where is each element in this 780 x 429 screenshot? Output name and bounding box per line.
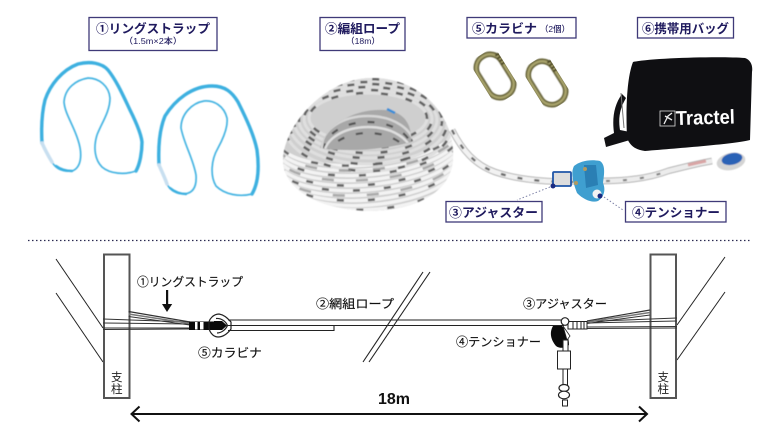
- label: carabiner: （2個）: [540, 24, 570, 34]
- label: carry bag: [638, 18, 734, 38]
- leader lines: [517, 187, 623, 210]
- label: braided rope: ②編組ロープ: [325, 21, 400, 36]
- icon: ring strap right: [159, 86, 258, 195]
- icon: adjuster: [550, 172, 571, 188]
- diagram: left post: [104, 254, 130, 398]
- diagram label: adjuster: ③アジャスター: [523, 297, 607, 311]
- label: tensioner: [626, 202, 726, 222]
- icon: tensioner: [572, 160, 604, 202]
- diagram: left post: 支: [111, 371, 123, 384]
- label: adjuster: ③アジャスター: [449, 206, 538, 220]
- label: braided rope: [320, 18, 405, 50]
- icon: rope tail: [452, 130, 712, 182]
- label: adjuster: [446, 202, 542, 222]
- icon: carabiner left: [471, 49, 519, 103]
- icon: carabiner right: [523, 56, 571, 110]
- diagram label: tensioner: ④テンショナー: [456, 335, 541, 349]
- label: carry bag: ⑥携帯用バッグ: [642, 21, 729, 36]
- span value: 18m: [378, 391, 410, 408]
- icon: ring strap left: [42, 63, 142, 173]
- diagram label: braided rope: ②網組ロープ: [316, 297, 394, 311]
- diagram: braces right: [677, 257, 725, 360]
- label: ring strap: [89, 18, 217, 50]
- diagram: right post: 支: [658, 371, 670, 384]
- label: tensioner: ④テンショナー: [632, 206, 720, 220]
- diagram: break mark: [363, 272, 430, 362]
- arrow: ring strap pointer: [162, 290, 172, 312]
- diagram label: ring strap: ①リングストラップ: [137, 275, 243, 289]
- icon: rope coil: [283, 78, 455, 211]
- diagram: right post: 柱: [658, 382, 670, 396]
- diagram: right sling: [587, 310, 677, 328]
- bag logo text: Tractel: [676, 106, 735, 130]
- diagram: adjuster: [561, 318, 587, 329]
- label: ring strap: （1.5m×2本）: [124, 36, 182, 46]
- label: carabiner: ⑤カラビナ: [472, 21, 537, 36]
- diagram: main rope: [228, 320, 564, 330]
- diagram: right post: [650, 254, 676, 398]
- arrow: span: [132, 406, 647, 422]
- diagram: braces left: [56, 259, 103, 362]
- divider: [28, 240, 752, 242]
- diagram: tensioner: [551, 326, 570, 406]
- diagram: carabiner: [209, 314, 231, 337]
- label: ring strap: ①リングストラップ: [96, 21, 210, 36]
- diagram: left connector: [189, 321, 227, 330]
- icon: carry bag: [604, 57, 752, 151]
- label: carabiner: [467, 18, 576, 38]
- label: braided rope: （18m）: [346, 36, 380, 46]
- icon: strap end eyelet: [715, 150, 747, 173]
- diagram: left post: 柱: [111, 382, 123, 396]
- diagram: left sling: [103, 312, 190, 330]
- diagram label: carabiner: ⑤カラビナ: [198, 346, 262, 360]
